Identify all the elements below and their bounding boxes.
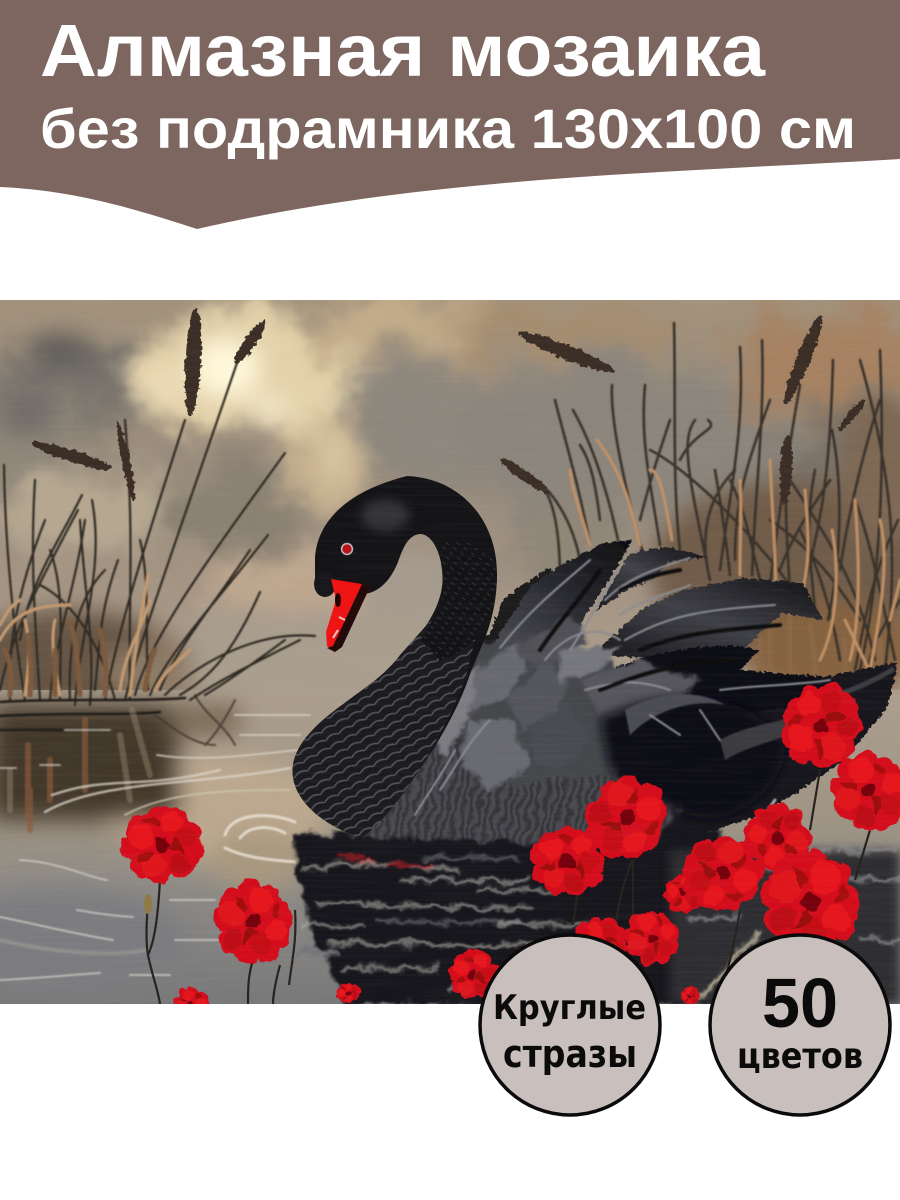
badge: 50 colors: цветов (737, 1036, 863, 1077)
badge: round rhinestones (480, 935, 660, 1115)
gray chest feathers (360, 615, 700, 845)
left reeds (0, 360, 315, 705)
flower stems (146, 770, 870, 1004)
feather highlights (415, 558, 892, 835)
back plumes (482, 540, 833, 711)
dark wing shadow (600, 698, 784, 818)
badge: 50 colors (710, 935, 890, 1115)
badge: 50 colors: 50 (762, 964, 838, 1042)
header banner (0, 0, 900, 229)
nose (314, 578, 334, 597)
title: Алмазная мозаика (40, 9, 766, 92)
cattails (30, 308, 868, 505)
swan body (360, 540, 898, 847)
eye (341, 543, 353, 555)
brush texture (122, 486, 861, 994)
badge: round rhinestones: стразы (503, 1032, 637, 1076)
tail (616, 662, 898, 836)
subtitle: без подрамника 130х100 см (40, 97, 856, 160)
right reeds (528, 323, 900, 680)
water (0, 610, 900, 1010)
swan neck and head (293, 476, 497, 838)
swan reflection (294, 830, 900, 1004)
red flowers (119, 682, 900, 1004)
beak (326, 579, 370, 652)
head sheen (361, 499, 409, 531)
badge: round rhinestones: Круглые (493, 988, 646, 1028)
painting: black swan on a lake (0, 295, 900, 1028)
sky and clouds (0, 295, 900, 720)
bud (144, 894, 152, 914)
reed underpainting (0, 390, 900, 710)
